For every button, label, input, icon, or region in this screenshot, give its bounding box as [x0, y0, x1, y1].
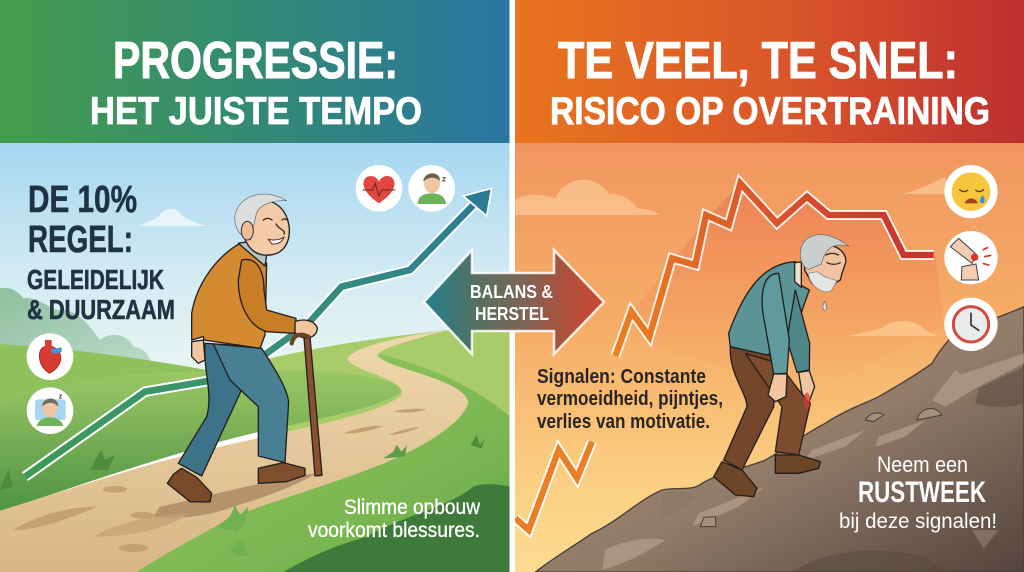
center divider — [510, 0, 515, 572]
cloud right — [902, 177, 949, 194]
face — [263, 218, 288, 234]
cane — [304, 337, 322, 476]
collar — [795, 262, 801, 287]
rear leg — [724, 347, 775, 470]
panel: right header — [515, 0, 1024, 143]
text: rest week advice: Neem een — [877, 452, 968, 477]
front shoe — [775, 455, 820, 473]
icon: sad face — [944, 165, 998, 218]
far arm — [787, 290, 810, 372]
text: rest week advice — [839, 452, 997, 533]
hair — [800, 235, 849, 269]
right sky — [512, 140, 1024, 572]
heading: 10% rule — [27, 179, 175, 325]
distant trees — [0, 288, 150, 362]
sweater — [729, 262, 809, 355]
text: smart build-up: Slimme opbouw — [344, 496, 481, 519]
text: warning signals — [537, 366, 723, 433]
left sky — [0, 140, 510, 393]
red glow under chart — [625, 183, 944, 393]
grass tufts — [0, 435, 485, 557]
rock shadows — [660, 367, 1024, 572]
collar — [238, 242, 267, 266]
erratic chart line — [615, 183, 934, 356]
path shadow under walker — [153, 473, 317, 518]
bottom corner shade — [283, 484, 510, 572]
ear — [241, 221, 253, 240]
panel: right overtraining scene — [512, 140, 1024, 572]
arrow: balance and recovery: BALANS & — [470, 282, 553, 302]
text: rest week advice: bij deze signalen! — [839, 510, 997, 533]
tired face — [826, 253, 840, 264]
title: left line 2: HET JUISTE TEMPO — [90, 90, 422, 133]
text: warning signals: Signalen: Constante — [537, 366, 706, 388]
front shoe — [258, 463, 305, 483]
heading: 10% rule: REGEL: — [28, 219, 133, 261]
icon: rested person — [408, 165, 455, 212]
lower chart segment — [515, 442, 592, 530]
sleep letter: z — [59, 392, 63, 401]
panel: left header — [0, 0, 510, 143]
near arm — [762, 273, 789, 374]
heading: 10% rule: & DUURZAAM — [27, 294, 175, 325]
arrow: balance and recovery — [424, 250, 604, 354]
text: smart build-up — [308, 496, 481, 542]
far hand — [799, 371, 815, 403]
icon: broken clock — [944, 298, 998, 351]
cloud left — [515, 180, 660, 215]
front hand — [295, 320, 317, 338]
text: warning signals: verlies van motivatie. — [537, 411, 710, 433]
rear shoe — [714, 462, 757, 497]
cloud low — [849, 321, 937, 336]
near hand — [768, 374, 787, 402]
sweater arm — [238, 259, 296, 333]
text: smart build-up: voorkomt blessures. — [308, 519, 480, 542]
far left hill — [0, 344, 207, 440]
panel: left progression scene — [0, 140, 510, 572]
progress line — [25, 188, 492, 477]
arrow: balance and recovery: HERSTEL — [475, 304, 549, 324]
icon: heart rate — [356, 165, 402, 212]
hair — [235, 194, 287, 240]
path marks — [13, 409, 427, 552]
head — [805, 245, 846, 287]
icon: heart anatomy — [27, 333, 73, 380]
text: warning signals: vermoeidheid, pijntjes, — [537, 388, 723, 410]
winding path — [0, 330, 468, 572]
front leg — [213, 344, 289, 463]
head — [242, 200, 289, 255]
small cloud — [138, 209, 207, 226]
mid meadow — [0, 370, 405, 512]
back shoe — [167, 468, 212, 502]
cane handle — [292, 335, 308, 343]
sleep letters: z — [442, 174, 446, 183]
sweater — [192, 243, 267, 348]
back leg — [178, 343, 257, 476]
front leg — [745, 353, 810, 455]
rock facets — [602, 353, 1024, 570]
title: left line 1: PROGRESSIE: — [113, 32, 398, 90]
exhausted senior — [714, 235, 849, 497]
icon: sleep on pillow — [27, 387, 73, 434]
heading: 10% rule: DE 10% — [28, 179, 137, 221]
knee pain mark — [804, 393, 810, 409]
back hand — [192, 340, 205, 363]
boulders — [700, 409, 942, 527]
icon: painful knee — [944, 231, 998, 284]
foreground meadow — [133, 353, 510, 572]
rocky slope — [535, 307, 1024, 572]
smile — [268, 237, 284, 244]
far right hill — [263, 330, 510, 440]
heading: 10% rule: GELEIDELIJK — [27, 264, 164, 295]
beard — [808, 272, 837, 292]
sweat drop — [823, 301, 826, 310]
walking senior — [167, 194, 322, 502]
